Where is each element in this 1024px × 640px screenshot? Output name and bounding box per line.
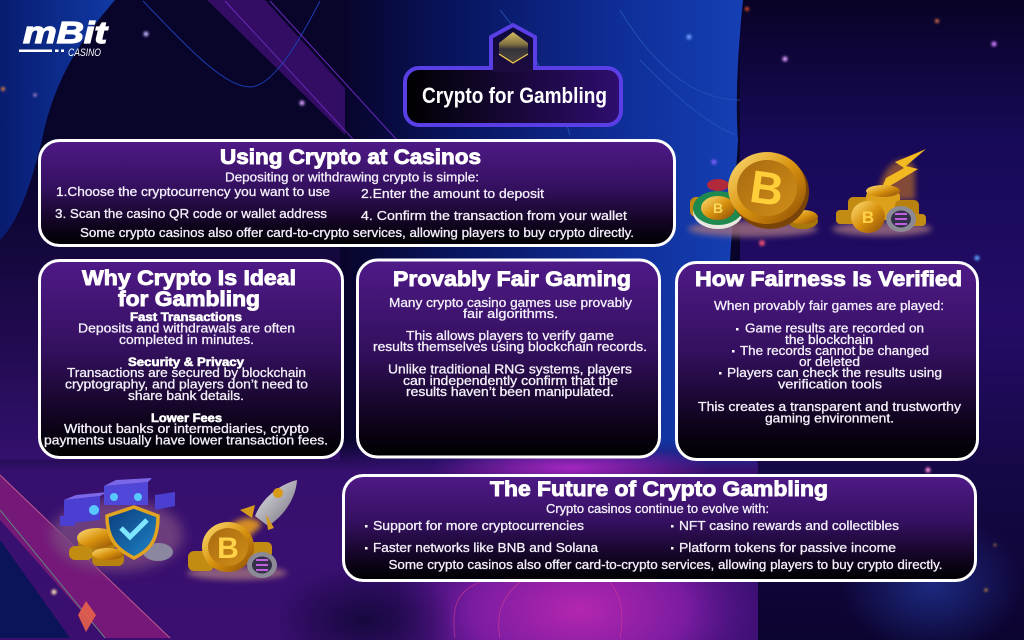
closing text [698,399,962,426]
paragraph 3: results haven’t been manipulated. [406,384,614,399]
title box [405,68,621,125]
bullet list [365,518,900,555]
item: fast transactions [78,310,295,347]
steps: 4. Confirm the transaction from your wallet [361,208,627,223]
heading: The Future of Crypto Gambling [490,478,828,501]
item: security and privacy: cryptography, and players don’t need to [65,376,308,392]
item: security and privacy [65,355,308,403]
bullet list: the blockchain [785,332,873,347]
logo: mBit Casino: CASINO [68,47,101,59]
bullet list: NFT casino rewards and collectibles [679,518,900,533]
icon: bitcoin coin with poker chip: B [747,160,787,216]
paragraph 3: can independently confirm that the [403,373,618,388]
logo: mBit Casino [19,15,109,59]
icon: rocket with coins: B [217,532,239,565]
footer note: Some crypto casinos also offer card-to-crypto services, allowing players to buy crypto directly. [388,557,942,572]
icon: coins with lightning bolt [832,149,932,236]
item: fast transactions: completed in minutes. [119,332,254,347]
item: fast transactions: Fast Transactions [130,310,242,324]
item: security and privacy: Transactions are secured by blockchain [67,365,306,380]
bullet list: Game results are recorded on [745,320,924,336]
heading [82,267,296,311]
intro: When provably fair games are played: [714,298,944,313]
closing text: gaming environment. [765,410,894,426]
heading: for Gambling [118,288,260,311]
heading: Why Crypto Is Ideal [82,267,296,290]
item: lower fees [44,411,328,448]
paragraph 2: results themselves using blockchain records. [373,339,647,354]
paragraph 2: This allows players to verify game [406,328,614,343]
paragraph 1 [389,295,633,321]
steps: 2.Enter the amount to deposit [361,186,544,201]
bullet list [719,320,942,392]
heading: Provably Fair Gaming [393,268,631,291]
footer note: Some crypto casinos also offer card-to-crypto services, allowing players to buy crypto directly. [80,225,634,240]
item: lower fees: Without banks or intermediaries, crypto [64,421,309,436]
bullet list: verification tools [778,376,883,392]
closing text: This creates a transparent and trustworthy [698,399,962,414]
panel: using crypto at casinos [40,140,674,246]
steps [55,184,627,223]
panel: provably fair gaming [358,260,660,457]
item: lower fees: payments usually have lower transaction fees. [44,432,328,448]
intro line: Depositing or withdrawing crypto is simple: [225,170,479,184]
steps: 3. Scan the casino QR code or wallet address [55,206,328,221]
icon: red crystal [78,601,96,632]
title badge [405,25,621,125]
logo: mBit Casino: mBit [23,15,109,50]
heading: Using Crypto at Casinos [220,146,481,169]
icon: coins with lightning bolt: B [862,208,874,227]
heading: How Fairness Is Verified [695,268,962,291]
item: fast transactions: Deposits and withdrawals are often [78,320,295,336]
bullet list: The records cannot be changed [740,343,929,358]
bullet list: or deleted [799,354,860,369]
paragraph 2 [373,328,647,354]
bullet list: Platform tokens for passive income [679,540,896,555]
icon: rocket with coins [187,480,297,580]
item: security and privacy: Security & Privacy [128,355,244,369]
paragraph 1: Many crypto casino games use provably [389,295,633,310]
title text: Crypto for Gambling [422,83,607,108]
paragraph 3 [388,362,633,399]
steps: 1.Choose the cryptocurrency you want to use [56,184,330,199]
icon: bitcoin coin with poker chip: B [713,200,723,216]
bullet list: Faster networks like BNB and Solana [373,540,599,555]
panel: how fairness is verified [676,262,978,460]
icon: hexagon tab with cube [491,25,535,68]
icon: shield with blockchain cubes [51,478,183,571]
paragraph 3: Unlike traditional RNG systems, players [388,362,633,376]
icon: bitcoin coin with poker chip [688,152,818,237]
bullet list: Players can check the results using [727,365,942,380]
item: security and privacy: share bank details. [128,388,244,403]
intro: Crypto casinos continue to evolve with: [546,501,769,516]
bullet list: Support for more cryptocurrencies [373,518,585,533]
paragraph 1: fair algorithms. [463,306,558,321]
panel: the future of crypto gambling [344,476,976,580]
item: lower fees: Lower Fees [151,411,222,425]
panel: why crypto is ideal [40,260,342,458]
